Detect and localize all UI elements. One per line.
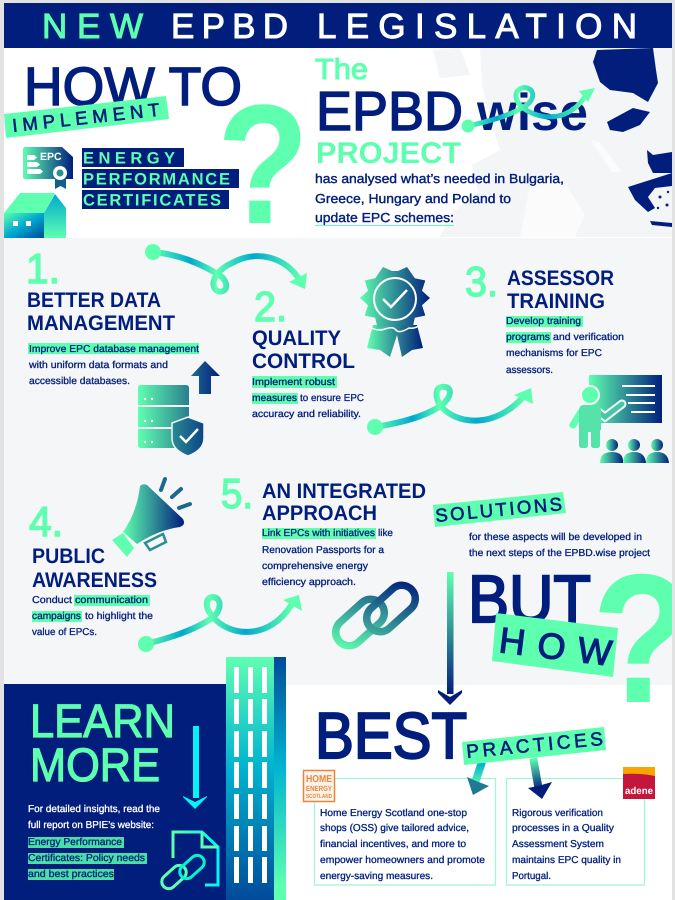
panel: 2 quality control <box>252 283 364 420</box>
icon: linked document <box>159 832 218 892</box>
panel: 4 public awareness <box>29 498 157 638</box>
icon: trainer with audience <box>573 375 669 463</box>
project description: update EPC schemes: <box>315 210 454 225</box>
project heading: the EPBD.wise project: wise <box>476 84 588 142</box>
title banner: LEGISLATION <box>317 7 637 46</box>
card: Home Energy Scotland: Home Energy Scotland one-stop <box>320 808 467 819</box>
project heading: the EPBD.wise project: EPBD <box>316 80 463 142</box>
illustration: building <box>226 657 286 900</box>
heading: energy performance certificates: CERTIFICATES <box>83 192 221 210</box>
panel: learn more: For detailed insights, read the <box>28 804 160 815</box>
panel: 5 an integrated approach: comprehensive energy <box>262 561 368 572</box>
panel: learn more <box>4 684 226 900</box>
project heading: the EPBD.wise project: The <box>315 54 368 86</box>
card: Portugal quality system: maintains EPC quality in <box>512 855 621 866</box>
logo: Home Energy Scotland <box>304 770 334 802</box>
arrow: swirl 2 to 3 <box>367 387 533 435</box>
panel: learn more: Certificates: Policy needs <box>28 853 145 864</box>
panel: 2 quality control: accuracy and reliability. <box>252 409 361 420</box>
map of Europe <box>433 48 672 237</box>
panel: 3 assessor training: and verification <box>553 332 624 343</box>
panel: 1 better data management <box>26 245 199 387</box>
heading: energy performance certificates <box>82 148 239 210</box>
heading: how to: HOW TO <box>24 57 242 117</box>
panel: 2 quality control: QUALITY <box>252 327 341 350</box>
panel: 3 assessor training: TRAINING <box>507 290 605 313</box>
arrow: practices to left card <box>467 762 489 795</box>
panel: 1 better data management: with uniform data formats and <box>28 360 168 371</box>
panel: learn more: LEARN <box>30 694 175 747</box>
solutions text: the next steps of the EPBD.wise project <box>469 548 650 559</box>
card: Home Energy Scotland: shops (OSS) give tailored advice, <box>320 823 469 834</box>
panel: 1 better data management: BETTER DATA <box>27 289 161 312</box>
card: Home Energy Scotland: financial incentives, and more to <box>320 839 466 850</box>
arrow: practices to right card <box>528 758 552 799</box>
panel: 2 quality control: 2. <box>254 283 287 330</box>
card: Portugal quality system: Rigorous verification <box>512 808 603 819</box>
icon: house <box>4 193 66 238</box>
project description <box>315 171 564 226</box>
heading: energy performance certificates: PERFORMANCE <box>83 170 230 188</box>
panel: 4 public awareness: 4. <box>29 498 63 545</box>
tag: implement: IMPLEMENT <box>11 99 161 136</box>
panel: 1 better data management: accessible databases. <box>29 376 130 387</box>
panel: 4 public awareness: campaigns <box>32 611 81 622</box>
panel: 2 quality control: CONTROL <box>252 350 355 373</box>
arrow: swirl 4 to 5 <box>138 595 302 652</box>
tag: solutions: SOLUTIONS <box>434 493 563 526</box>
panel: learn more: Energy Performance <box>28 837 122 848</box>
solutions text: for these aspects will be developed in <box>469 532 642 543</box>
panel: learn more: and best practices <box>28 869 114 880</box>
card: Portugal quality system: Portugal. <box>512 871 551 882</box>
panel: 3 assessor training: mechanisms for EPC <box>506 348 602 359</box>
panel: 5 an integrated approach: like <box>378 528 393 539</box>
panel: 4 public awareness: to highlight the <box>85 611 153 622</box>
panel: 3 assessor training: programs <box>506 332 550 343</box>
panel: 3 assessor training: 3. <box>465 258 498 305</box>
panel: 1 better data management: Improve EPC database management <box>29 344 199 355</box>
panel: 1 better data management: MANAGEMENT <box>27 312 175 335</box>
card: Home Energy Scotland <box>314 778 496 885</box>
icon: database server with shield <box>138 361 220 456</box>
icon: megaphone <box>112 479 190 557</box>
card: Home Energy Scotland: energy-saving measures. <box>320 871 433 882</box>
panel: 2 quality control: Implement robust <box>252 377 335 388</box>
logo: Home Energy Scotland: SCOTLAND <box>306 793 333 800</box>
heading: energy performance certificates: ENERGY <box>83 150 175 168</box>
panel: 5 an integrated approach: AN INTEGRATED <box>262 480 426 503</box>
panel: 2 quality control: to ensure EPC <box>300 393 364 404</box>
panel: 4 public awareness: AWARENESS <box>32 569 157 592</box>
logo: adene: adene <box>625 786 653 797</box>
logo: Home Energy Scotland: HOME <box>306 774 332 785</box>
big question mark: ? <box>217 70 309 260</box>
heading: best: BEST <box>315 699 467 772</box>
card: Portugal quality system <box>506 778 644 885</box>
panel: 5 an integrated approach: APPROACH <box>262 502 377 525</box>
arrow: swirl 1 to 2 <box>145 244 307 292</box>
panel: 4 public awareness: communication <box>75 595 148 606</box>
panel: 3 assessor training: ASSESSOR <box>507 267 614 290</box>
panel: 3 assessor training: assessors. <box>506 365 553 376</box>
heading: but: BUT <box>468 562 591 637</box>
project heading: the EPBD.wise project: PROJECT <box>316 137 461 170</box>
card: Home Energy Scotland: empower homeowners and promote <box>320 855 485 866</box>
logo: Home Energy Scotland: ENERGY <box>306 784 332 793</box>
tag: how: HOW <box>497 619 614 674</box>
panel: 5 an integrated approach <box>221 470 426 588</box>
icon: quality badge <box>360 267 430 357</box>
panel: 3 assessor training: Develop training <box>506 316 581 327</box>
project heading: the EPBD.wise project <box>315 54 595 170</box>
project description: has analysed what’s needed in Bulgaria, <box>315 171 564 186</box>
solutions text <box>469 532 650 559</box>
panel: 5 an integrated approach: efficiency approach. <box>262 577 356 588</box>
panel: 3 assessor training <box>465 258 624 376</box>
arrow: down to best practices <box>438 572 462 705</box>
panel: 1 better data management: 1. <box>26 245 60 292</box>
panel: 4 public awareness: Conduct <box>32 595 72 606</box>
tag: practices: PRACTICES <box>465 729 604 763</box>
card: Portugal quality system: processes in a Quality <box>512 823 614 834</box>
title banner: NEW <box>42 7 143 46</box>
panel: learn more: full report on BPIE’s website: <box>28 820 154 831</box>
panel: 5 an integrated approach: Renovation Passports for a <box>262 545 384 556</box>
panel: 4 public awareness: PUBLIC <box>32 545 105 568</box>
panel: 4 public awareness: value of EPCs. <box>32 627 97 638</box>
project description: Greece, Hungary and Poland to <box>315 191 511 206</box>
icon: EPC certificate <box>23 147 73 189</box>
title banner: EPBD <box>171 7 288 46</box>
title banner <box>4 3 672 48</box>
icon: chain link <box>330 580 421 651</box>
panel: 2 quality control: measures <box>252 393 297 404</box>
panel: 5 an integrated approach: Link EPCs with initiatives <box>262 528 375 539</box>
logo: adene <box>623 767 655 799</box>
panel: 5 an integrated approach: 5. <box>221 470 253 517</box>
card: Portugal quality system: Assessment System <box>512 839 604 850</box>
panel: learn more: MORE <box>30 738 160 791</box>
icon: EPC certificate: EPC <box>40 151 62 163</box>
